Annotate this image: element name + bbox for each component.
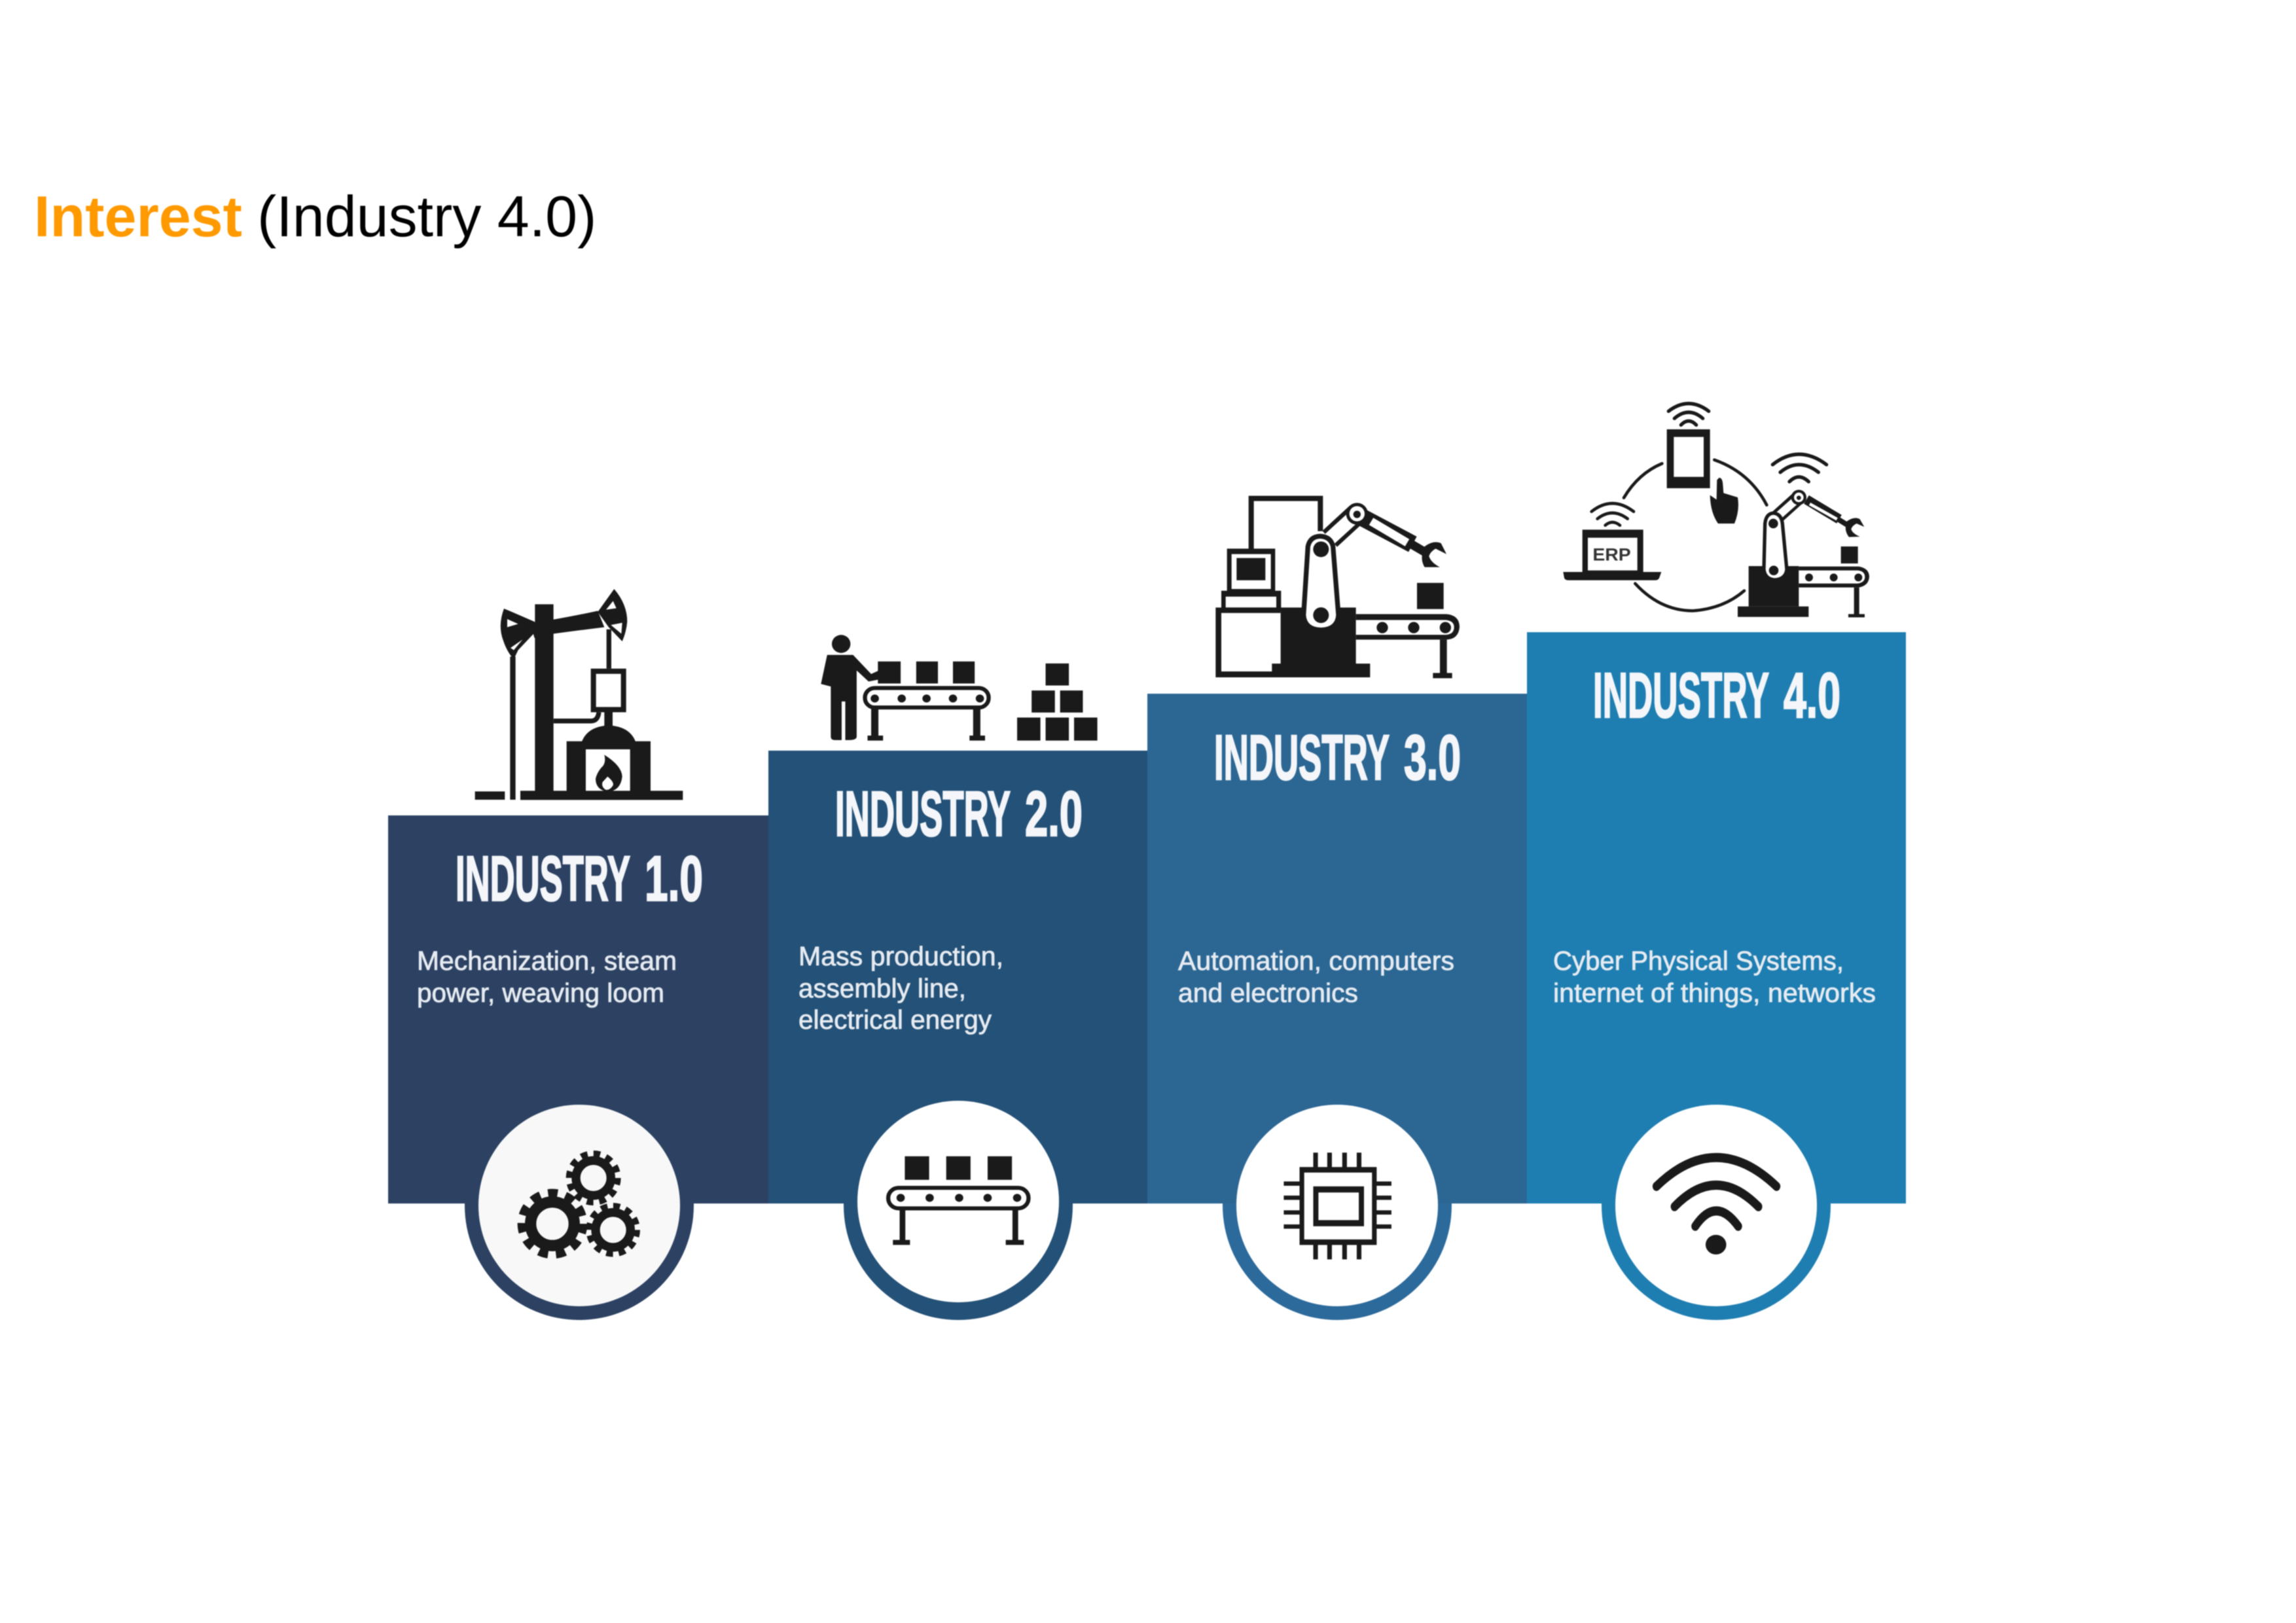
icon: gears badge <box>465 1091 694 1320</box>
text: Industry 1.0 description: power, weaving loom <box>417 978 664 1008</box>
text: Industry 2.0 description <box>798 941 1003 1035</box>
text: Industry 4.0 description: Cyber Physical Systems, <box>1553 946 1844 976</box>
heading: Industry 1.0: INDUSTRY <box>456 843 630 914</box>
text: Industry 4.0 description <box>1553 946 1876 1008</box>
title: (Industry 4.0) <box>257 184 596 249</box>
panel: Industry 3.0 <box>1147 694 1527 1320</box>
heading: Industry 2.0: 2.0 <box>1025 778 1083 849</box>
icon: wifi badge <box>1602 1091 1831 1320</box>
heading: Industry 2.0: INDUSTRY <box>835 778 1011 849</box>
panel: Industry 4.0 <box>1527 632 1906 1320</box>
text: Industry 3.0 description <box>1178 946 1454 1008</box>
icon: pump and furnace <box>475 589 683 800</box>
icon: conveyor badge <box>844 1091 1073 1320</box>
text: Industry 2.0 description: assembly line, <box>798 973 966 1003</box>
title: Interest <box>34 184 242 249</box>
text: Industry 3.0 description: Automation, computers <box>1178 946 1454 976</box>
panel: Industry 2.0 <box>768 751 1148 1320</box>
heading: Industry 3.0: INDUSTRY <box>1214 722 1390 793</box>
heading: Industry 4.0: INDUSTRY <box>1593 660 1769 731</box>
icon: worker with assembly line and stacked boxes <box>821 635 1098 741</box>
text: Industry 3.0 description: and electronics <box>1178 978 1358 1008</box>
icon: connected factory network: ERP <box>1592 545 1631 565</box>
icon: connected factory network <box>1563 404 1869 617</box>
heading: Industry 3.0: 3.0 <box>1404 722 1461 793</box>
heading: Industry 1.0: 1.0 <box>645 843 703 914</box>
text: Industry 1.0 description <box>417 946 677 1008</box>
icon: computer and robot arm <box>1215 499 1460 678</box>
text: Industry 4.0 description: internet of things, networks <box>1553 978 1876 1008</box>
panel: Industry 1.0 <box>388 815 769 1320</box>
text: Industry 1.0 description: Mechanization, steam <box>417 946 677 976</box>
heading: Industry 4.0: 4.0 <box>1784 660 1840 731</box>
text: Industry 2.0 description: electrical energy <box>798 1005 992 1035</box>
text: Industry 2.0 description: Mass production, <box>798 941 1003 971</box>
icon: chip badge <box>1223 1091 1452 1320</box>
